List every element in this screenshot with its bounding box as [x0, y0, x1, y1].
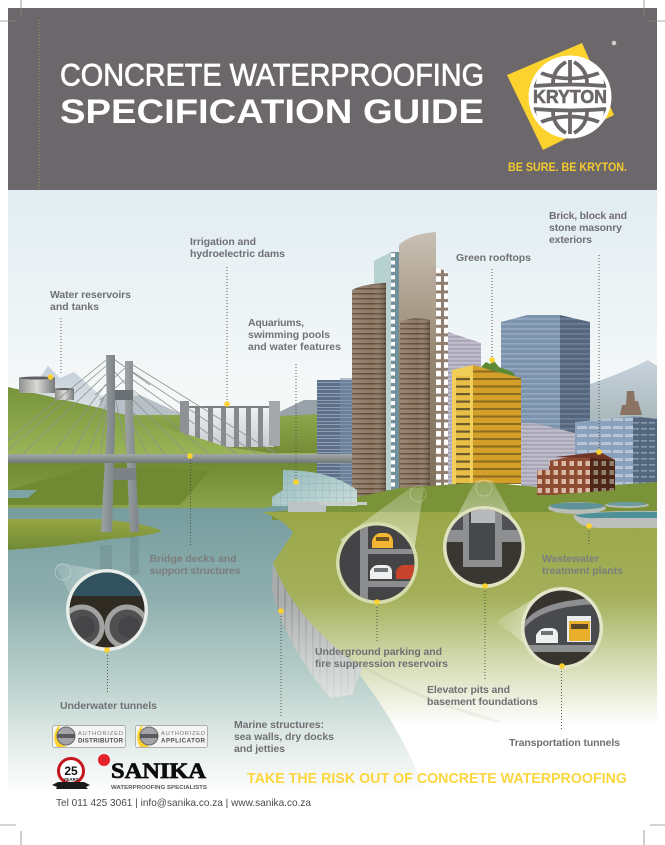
leader lines: [61, 255, 599, 730]
sky: [8, 190, 657, 430]
yellow green-roof building: [452, 361, 521, 484]
Sanika logo: SANIKA: [111, 758, 206, 783]
label: water reservoirs: [50, 289, 131, 313]
label: aquariums: [248, 317, 341, 353]
label: elevator pits: Elevator pits and: [427, 684, 510, 696]
water reservoir tanks: [19, 376, 74, 400]
badge: 25 years: YEARS: [63, 777, 79, 782]
callout: elevator pit: [443, 480, 525, 588]
callout: parking: [336, 486, 426, 604]
contact line: Tel 011 425 3061 | info@sanika.co.za | www.sanika.co.za: [56, 797, 311, 809]
right hill: [272, 482, 657, 520]
label: wastewater: Wastewater: [542, 553, 599, 565]
label: underground parking: fire suppression reservoirs: [315, 658, 448, 670]
blue building left: [317, 378, 352, 495]
label: elevator pits: [427, 684, 538, 708]
water: [8, 490, 418, 780]
label: bridge decks: support structures: [150, 565, 241, 577]
left hills: [8, 387, 330, 508]
label: masonry: stone masonry: [549, 222, 622, 234]
label: aquariums: swimming pools: [248, 329, 330, 341]
mainland: [262, 512, 657, 780]
bridge cables: [8, 360, 278, 455]
label: bridge decks: Bridge decks and: [150, 553, 236, 565]
badge: authorized applicator: [136, 724, 208, 748]
badge: 25 years: 25: [64, 764, 78, 778]
label: wastewater: treatment plants: [542, 565, 623, 577]
label: masonry: [549, 210, 627, 246]
label: water reservoirs: and tanks: [50, 301, 99, 313]
glass tower: [374, 252, 400, 492]
label: marine structures: [234, 719, 334, 755]
label: underground parking: Underground parking and: [315, 646, 442, 658]
callout: transportation tunnel: [497, 587, 603, 669]
illustrated scene: [8, 190, 657, 830]
label: aquariums: and water features: [248, 341, 341, 353]
badge: authorized distributor: AUTHORIZED: [78, 731, 123, 737]
title: [60, 56, 484, 131]
label: wastewater: [542, 553, 623, 577]
label: green rooftops: Green rooftops: [456, 252, 531, 264]
Sanika logo: WATERPROOFING SPECIALISTS: [111, 785, 207, 791]
tall tan tower: [399, 232, 448, 490]
left island: [8, 519, 162, 550]
inner brown tower: [400, 318, 430, 490]
label: masonry: exteriors: [549, 234, 592, 246]
dam: [180, 401, 280, 447]
big blue building: [501, 315, 590, 433]
badge: 25 years: [52, 758, 90, 789]
label: dams: [190, 236, 285, 260]
header dotted guide: [38, 20, 40, 189]
label: dams: Irrigation and: [190, 236, 256, 248]
label: water reservoirs: Water reservoirs: [50, 289, 131, 301]
bridge deck: [8, 454, 352, 463]
Kryton logo: [507, 41, 616, 150]
label: aquariums: Aquariums,: [248, 317, 304, 329]
slogan: TAKE THE RISK OUT OF CONCRETE WATERPROOFING: [247, 771, 627, 787]
header panel: [8, 8, 657, 190]
label: masonry: Brick, block and: [549, 210, 627, 222]
lilac low building: [521, 423, 575, 487]
Kryton logo: KRYTON: [533, 87, 607, 107]
aquarium: [272, 470, 367, 512]
badge: authorized applicator: APPLICATOR: [161, 738, 206, 744]
yellow marker dots: [48, 357, 602, 669]
label: bridge decks: [150, 553, 241, 577]
lilac building: [448, 332, 481, 490]
bridge dotted leader: [190, 460, 192, 547]
tagline: BE SURE. BE KRYTON.: [508, 162, 627, 174]
brown left tower: [352, 283, 386, 497]
title: CONCRETE WATERPROOFING: [60, 56, 484, 92]
shoreline shadow: [340, 651, 500, 722]
label: marine structures: sea walls, dry docks: [234, 731, 334, 743]
badge: authorized distributor: [52, 724, 126, 748]
label: dams: hydroelectric dams: [190, 248, 285, 260]
badge: authorized applicator: AUTHORIZED: [161, 731, 205, 737]
label: marine structures: and jetties: [234, 743, 285, 755]
label: transportation tunnels: Transportation tunnels: [509, 737, 620, 749]
label: underground parking: [315, 646, 448, 670]
Sanika logo: [98, 754, 207, 791]
mountains: [35, 360, 657, 420]
bridge towers: [101, 355, 139, 532]
chimney: [620, 391, 642, 415]
title: SPECIFICATION GUIDE: [60, 93, 484, 131]
sea wall: [272, 563, 362, 698]
label: underwater tunnels: Underwater tunnels: [60, 700, 157, 712]
back hill: [133, 414, 317, 453]
brick building: [537, 452, 615, 495]
wastewater treatment tanks: [548, 502, 657, 528]
label: marine structures: Marine structures:: [234, 719, 324, 731]
badge: authorized distributor: DISTRIBUTOR: [78, 738, 124, 744]
right blue building: [575, 416, 657, 485]
pier reflections: [100, 536, 139, 575]
callout: underwater tunnels: [55, 563, 148, 651]
label: elevator pits: basement foundations: [427, 696, 538, 708]
